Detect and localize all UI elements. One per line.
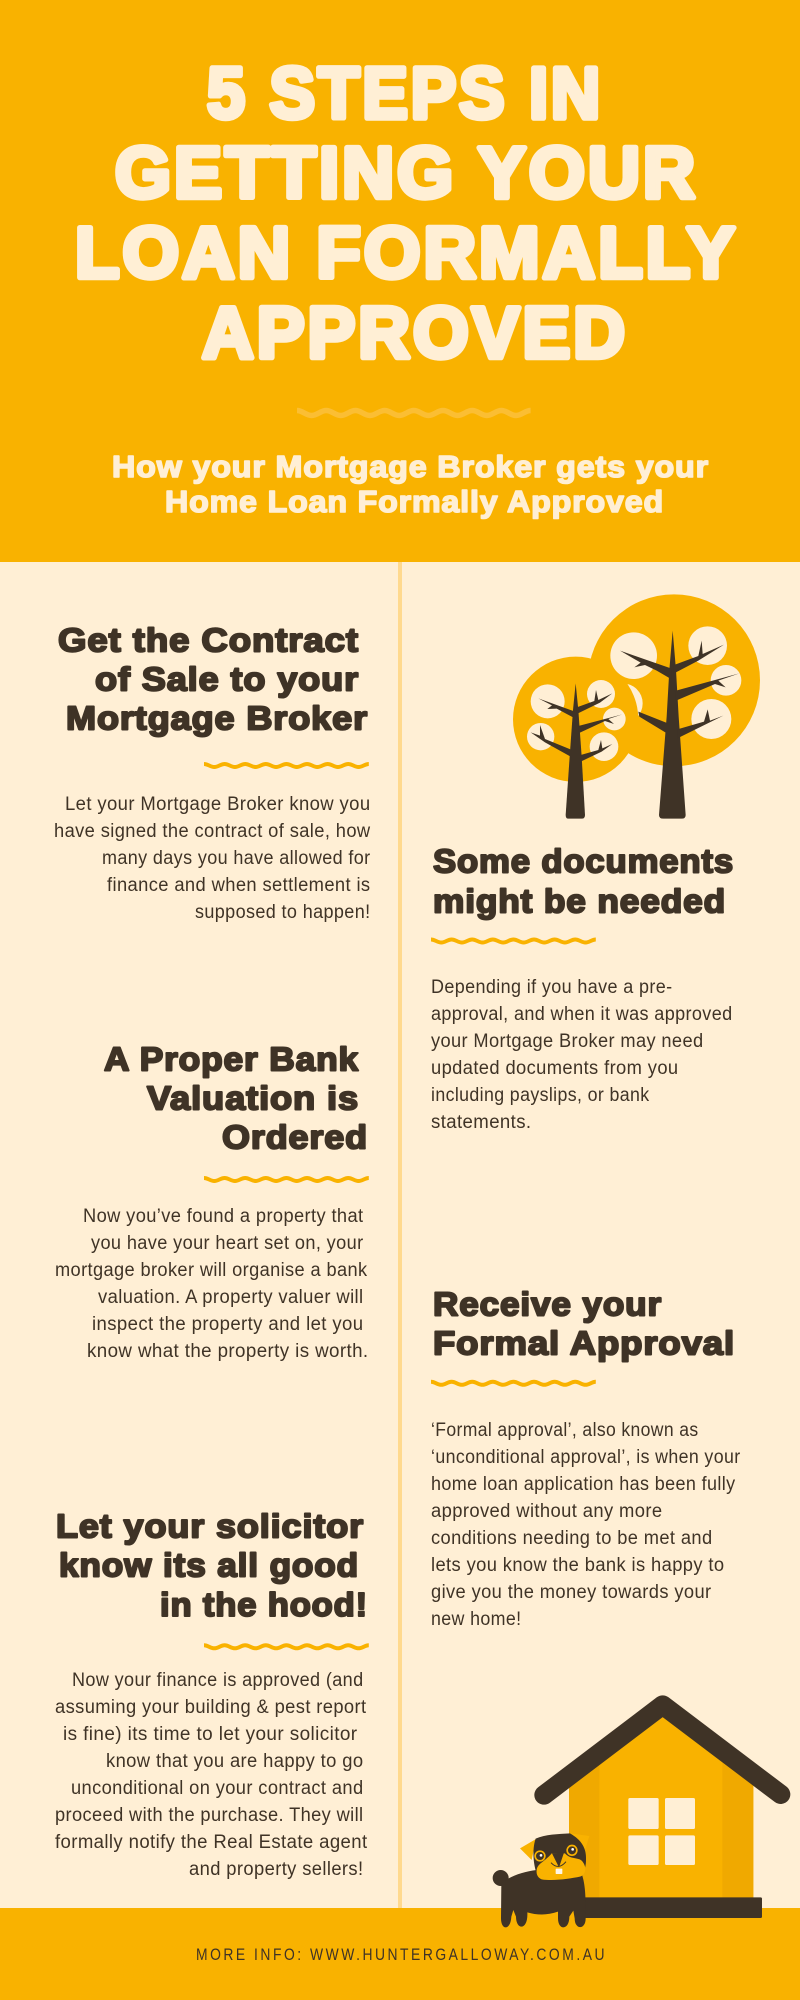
wave: step 5 [204, 1645, 369, 1648]
body text: step 3 [55, 1206, 368, 1362]
subtitle: How your Mortgage Broker gets your [112, 449, 709, 484]
title: 5 STEPS IN [207, 54, 603, 134]
heading: step 1: Get the Contract [58, 622, 359, 660]
title: GETTING YOUR [115, 134, 698, 214]
panel: step 3 bank valuation [55, 1042, 369, 1362]
body text: step 3: Now you’ve found a property that [83, 1206, 364, 1227]
body text: step 3: mortgage broker will organise a bank [55, 1260, 368, 1281]
body text: step 5: and property sellers! [189, 1859, 364, 1880]
body text: step 3: valuation. A property valuer will [98, 1287, 364, 1308]
heading: step 4 [433, 1286, 735, 1362]
header band [0, 0, 800, 562]
title: APPROVED [202, 294, 628, 374]
heading: step 1 [58, 622, 368, 738]
icon: two orange trees [513, 594, 760, 819]
icon: pug dog [493, 1833, 589, 1927]
icon: house [544, 1705, 781, 1918]
heading: step 5 [56, 1508, 368, 1624]
title: LOAN FORMALLY [75, 214, 738, 294]
body text: step 1: have signed the contract of sale, how [54, 821, 370, 842]
body text: step 4: lets you know the bank is happy to [431, 1555, 724, 1576]
body text: step 1 [54, 794, 371, 923]
body text: step 1: Let your Mortgage Broker know you [65, 794, 370, 815]
body text: step 1: many days you have allowed for [102, 848, 371, 869]
small tree [513, 657, 638, 819]
heading: step 5: Let your solicitor [56, 1508, 364, 1546]
body text: step 5: proceed with the purchase. They will [55, 1805, 364, 1826]
body text: step 5: assuming your building & pest report [55, 1697, 367, 1718]
footer band [0, 1908, 800, 2000]
big tree [588, 594, 760, 819]
panel: step 1 contract of sale [54, 622, 371, 923]
body text: step 4: ‘Formal approval’, also known as [431, 1420, 698, 1441]
heading: step 4: Formal Approval [433, 1326, 735, 1362]
body text: step 2: statements. [431, 1112, 532, 1133]
body text: step 4 [431, 1420, 741, 1630]
body text: step 3: inspect the property and let you [92, 1314, 364, 1335]
footer text: MORE INFO: WWW.HUNTERGALLOWAY.COM.AU [196, 1946, 607, 1964]
wave: step 2 [431, 940, 596, 942]
body text: step 4: give you the money towards your [431, 1582, 712, 1603]
heading: step 3: Ordered [222, 1120, 368, 1156]
body text: step 4: new home! [431, 1609, 522, 1630]
panel: step 5 solicitor [55, 1508, 369, 1880]
heading: step 5: in the hood! [160, 1587, 368, 1624]
heading: step 2: might be needed [433, 884, 726, 920]
heading: step 3: Valuation is [147, 1080, 359, 1118]
body text: step 2: approval, and when it was approved [431, 1004, 732, 1025]
body text: step 5: is fine) its time to let your solicitor [63, 1724, 358, 1745]
heading: step 2: Some documents [433, 844, 734, 880]
panel: step 2 documents [431, 844, 734, 1133]
body text: step 4: ‘unconditional approval’, is when your [431, 1447, 741, 1468]
heading: step 4: Receive your [433, 1286, 662, 1324]
body text: step 2: including payslips, or bank [431, 1085, 650, 1106]
body text: step 5: Now your finance is approved (and [72, 1670, 364, 1691]
heading: step 5: know its all good [59, 1548, 359, 1584]
body text: step 2: Depending if you have a pre- [431, 977, 672, 998]
body text: step 2 [431, 977, 732, 1133]
body text: step 3: know what the property is worth. [87, 1341, 368, 1362]
heading: step 1: of Sale to your [95, 662, 359, 698]
body text: step 4: home loan application has been fully [431, 1474, 736, 1495]
body text: step 3: you have your heart set on, your [91, 1233, 364, 1254]
heading: step 3: A Proper Bank [104, 1042, 359, 1078]
body text: step 2: updated documents from you [431, 1058, 678, 1079]
body text: step 5: formally notify the Real Estate agent [55, 1832, 368, 1853]
centre column divider [398, 562, 402, 1908]
heading: step 1: Mortgage Broker [66, 700, 368, 738]
body text: step 5: know that you are happy to go [106, 1751, 364, 1772]
body text: step 4: approved without any more [431, 1501, 662, 1522]
title [75, 54, 738, 374]
title wave divider [297, 410, 531, 416]
body text: step 2: your Mortgage Broker may need [431, 1031, 704, 1052]
body text: step 4: conditions needing to be met and [431, 1528, 712, 1549]
wave: step 1 [204, 764, 369, 767]
subtitle: Home Loan Formally Approved [165, 484, 664, 519]
body text: step 5: unconditional on your contract and [71, 1778, 364, 1799]
wave: step 3 [204, 1178, 369, 1181]
body text: step 1: supposed to happen! [195, 902, 370, 923]
heading: step 3 [104, 1042, 368, 1156]
body text: step 1: finance and when settlement is [107, 875, 370, 896]
wave: step 4 [431, 1382, 596, 1385]
heading: step 2 [433, 844, 734, 920]
subtitle [112, 449, 709, 519]
body text: step 5 [55, 1670, 368, 1880]
panel: step 4 formal approval [431, 1286, 741, 1630]
